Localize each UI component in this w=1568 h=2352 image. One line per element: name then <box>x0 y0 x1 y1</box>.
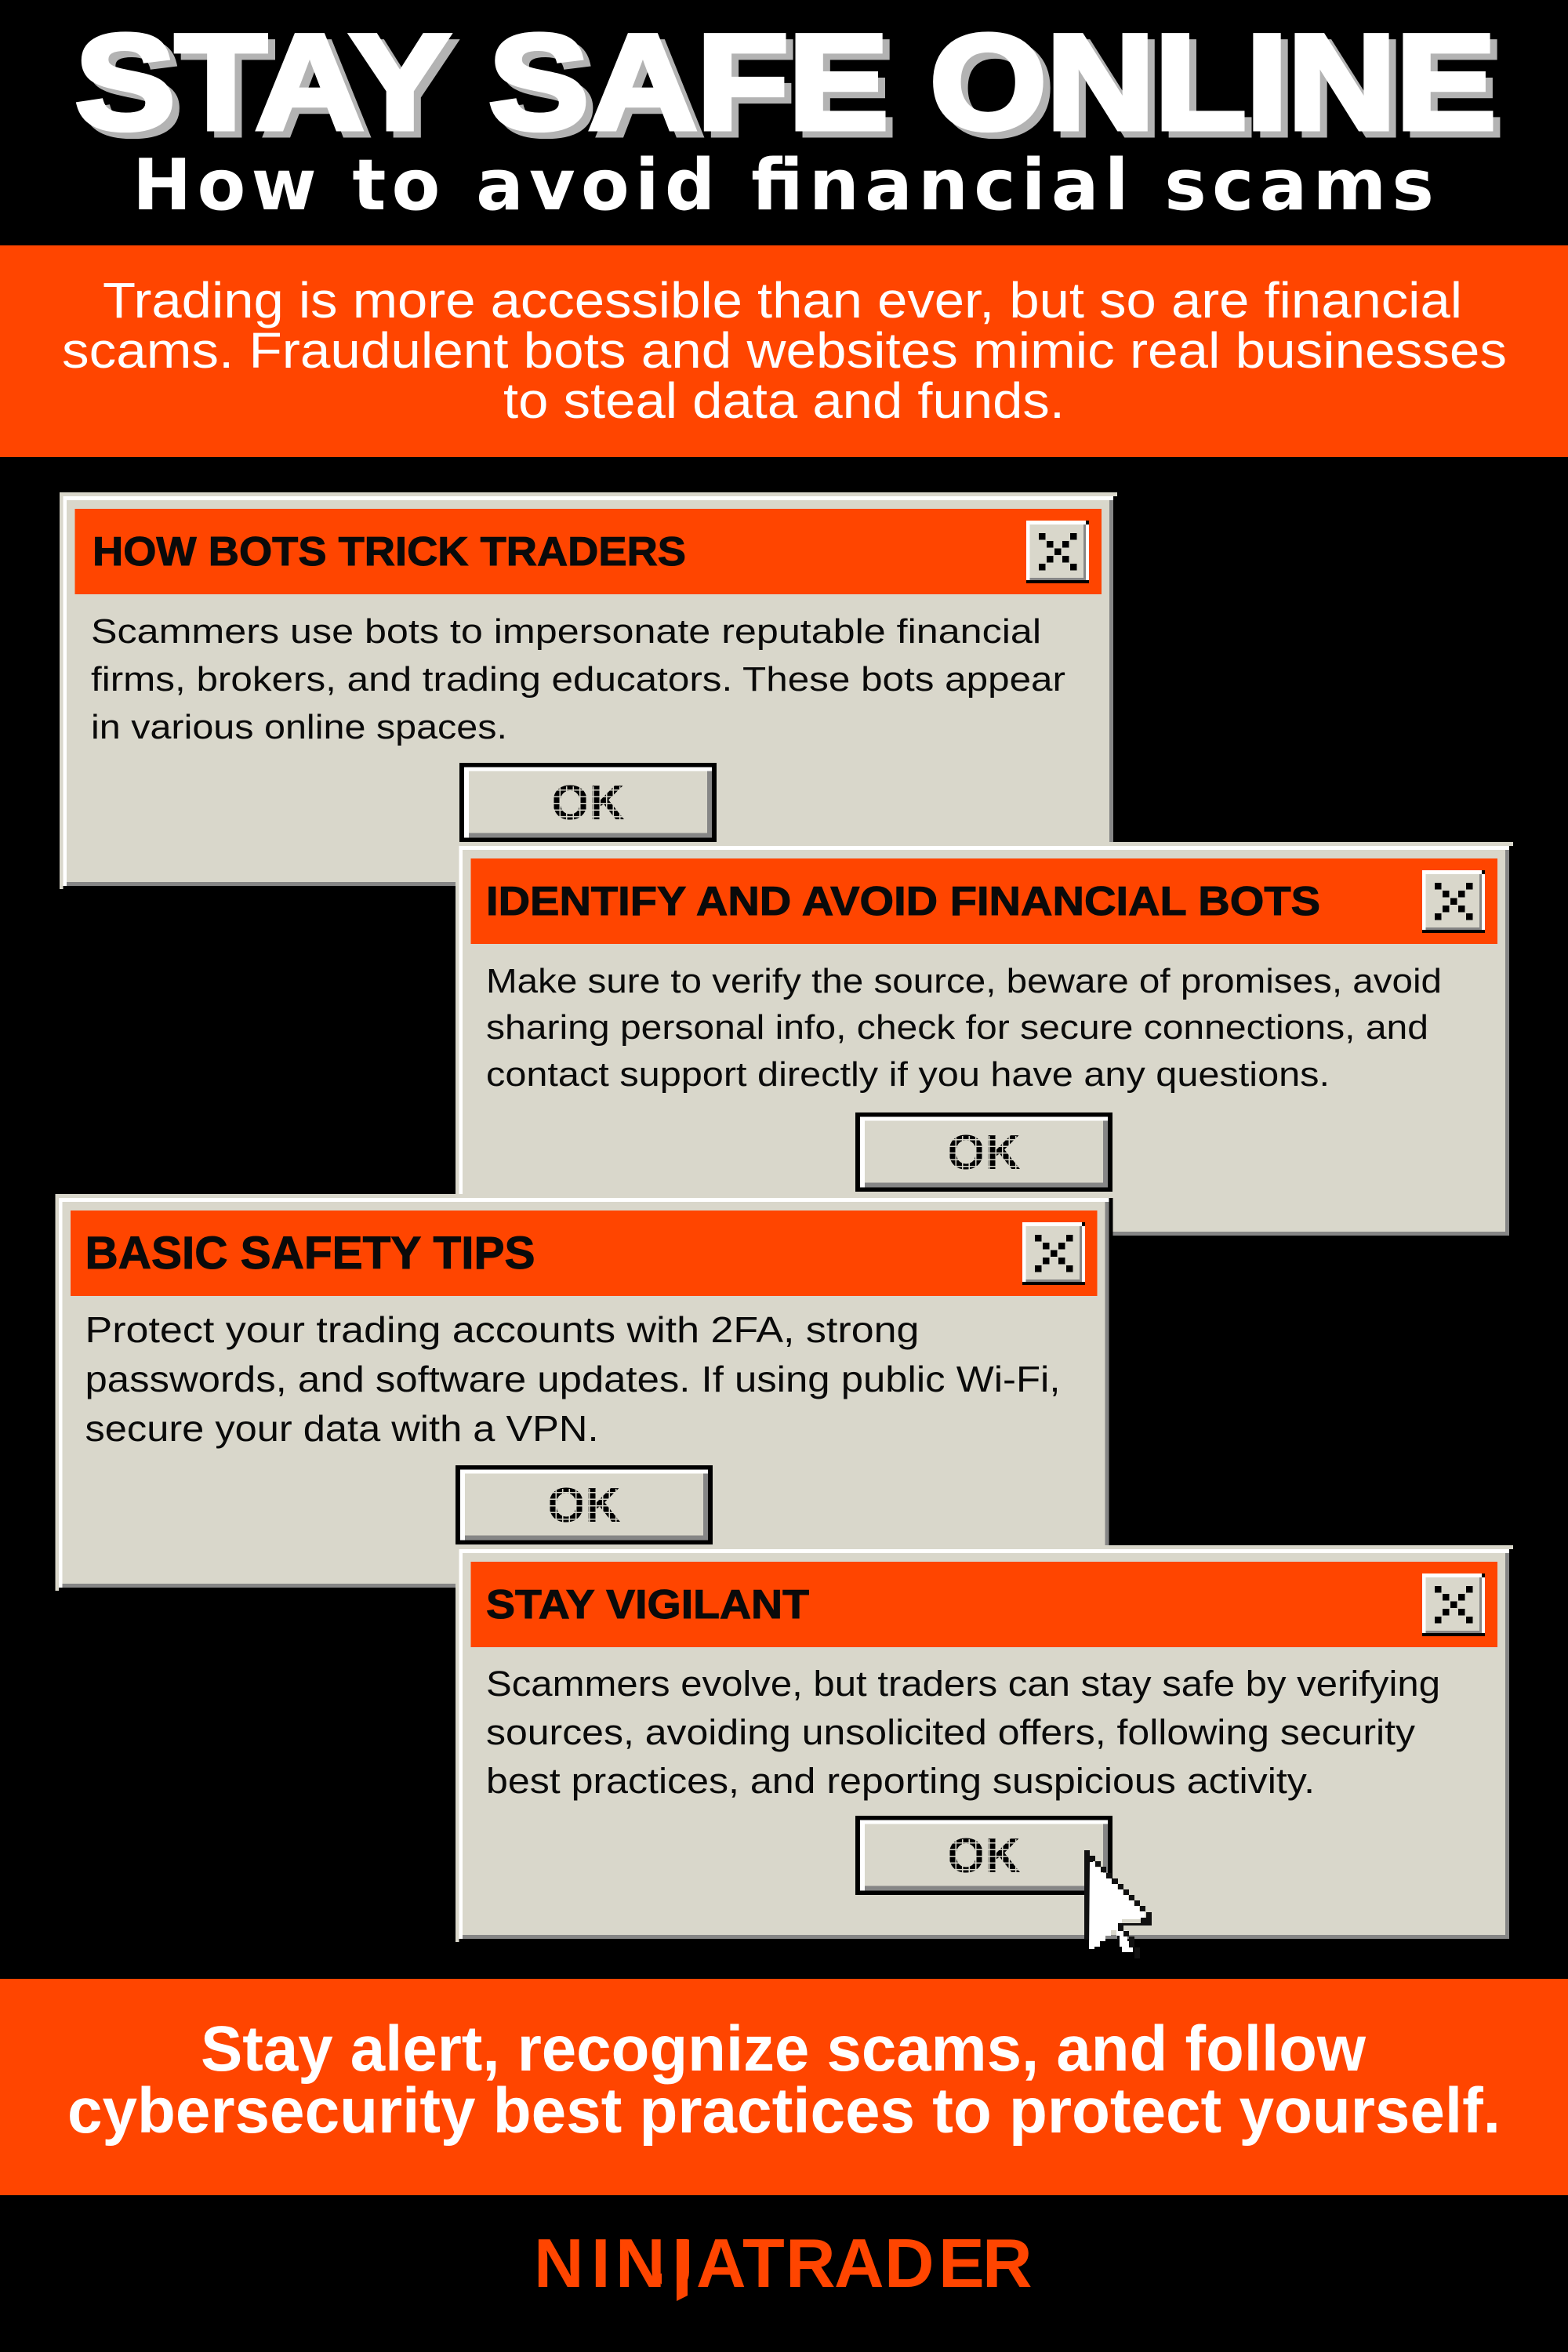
icon: close button <box>1026 521 1089 583</box>
subtitle: How to avoid financial scams <box>132 144 1434 227</box>
window frame and title bar <box>456 1545 1513 1942</box>
OK button: OK <box>947 1829 1021 1883</box>
icon: close button <box>1422 1573 1485 1636</box>
intro text: to steal data and funds. <box>503 372 1065 429</box>
OK button <box>459 763 717 842</box>
panel body text: contact support directly if you have any questions. <box>486 1055 1330 1094</box>
panel body text: secure your data with a VPN. <box>85 1408 598 1449</box>
panel body text: Scammers use bots to impersonate reputable financial <box>91 612 1041 651</box>
panel heading: HOW BOTS TRICK TRADERS <box>93 529 686 575</box>
panel body text: sharing personal info, check for secure connections, and <box>486 1008 1428 1047</box>
conclusion text: Stay alert, recognize scams, and follow <box>201 2013 1366 2085</box>
window frame and title bar <box>55 1194 1113 1591</box>
panel heading: STAY VIGILANT <box>486 1582 809 1628</box>
panel body text <box>486 962 1442 1094</box>
panel body text: passwords, and software updates. If using public Wi-Fi, <box>85 1359 1060 1399</box>
OK button <box>855 1816 1112 1895</box>
intro banner <box>0 245 1568 457</box>
panel: identify and avoid financial bots <box>456 842 1513 1239</box>
OK button <box>456 1465 713 1544</box>
conclusion banner <box>0 1979 1568 2195</box>
intro text <box>62 272 1507 429</box>
panel body text: firms, brokers, and trading educators. These bots appear <box>91 660 1065 699</box>
intro text: scams. Fraudulent bots and websites mimic real businesses <box>62 322 1507 379</box>
panel body text: Protect your trading accounts with 2FA, strong <box>85 1309 919 1350</box>
panel body text <box>486 1664 1440 1801</box>
panel: stay vigilant <box>456 1545 1513 1942</box>
OK button <box>855 1112 1112 1192</box>
panel: how bots trick traders <box>60 492 1117 889</box>
panel body text: sources, avoiding unsolicited offers, following security <box>486 1712 1416 1752</box>
OK button: OK <box>551 776 625 830</box>
logo: NinjaTrader: NINJATRADER <box>534 2224 1033 2302</box>
window frame and title bar <box>456 842 1513 1239</box>
panel body text <box>85 1309 1060 1449</box>
OK button: OK <box>547 1479 621 1533</box>
conclusion text <box>67 2013 1501 2147</box>
panel body text: Make sure to verify the source, beware of promises, avoid <box>486 962 1442 1000</box>
panel heading: BASIC SAFETY TIPS <box>85 1228 535 1279</box>
panel: basic safety tips <box>55 1194 1113 1591</box>
panel body text: Scammers evolve, but traders can stay safe by verifying <box>486 1664 1440 1704</box>
OK button: OK <box>947 1126 1021 1180</box>
intro text: Trading is more accessible than ever, but so are financial <box>103 272 1462 328</box>
icon: close button <box>1022 1222 1085 1285</box>
panel body text: best practices, and reporting suspicious activity. <box>486 1761 1315 1801</box>
panel body text: in various online spaces. <box>91 708 507 746</box>
window frame and title bar <box>60 492 1117 889</box>
panel body text <box>91 612 1065 746</box>
icon: mouse cursor <box>1084 1850 1152 1958</box>
panel heading: IDENTIFY AND AVOID FINANCIAL BOTS <box>486 879 1320 924</box>
conclusion text: cybersecurity best practices to protect yourself. <box>67 2075 1501 2147</box>
icon: close button <box>1422 870 1485 933</box>
title: STAY SAFE ONLINE <box>75 7 1496 158</box>
